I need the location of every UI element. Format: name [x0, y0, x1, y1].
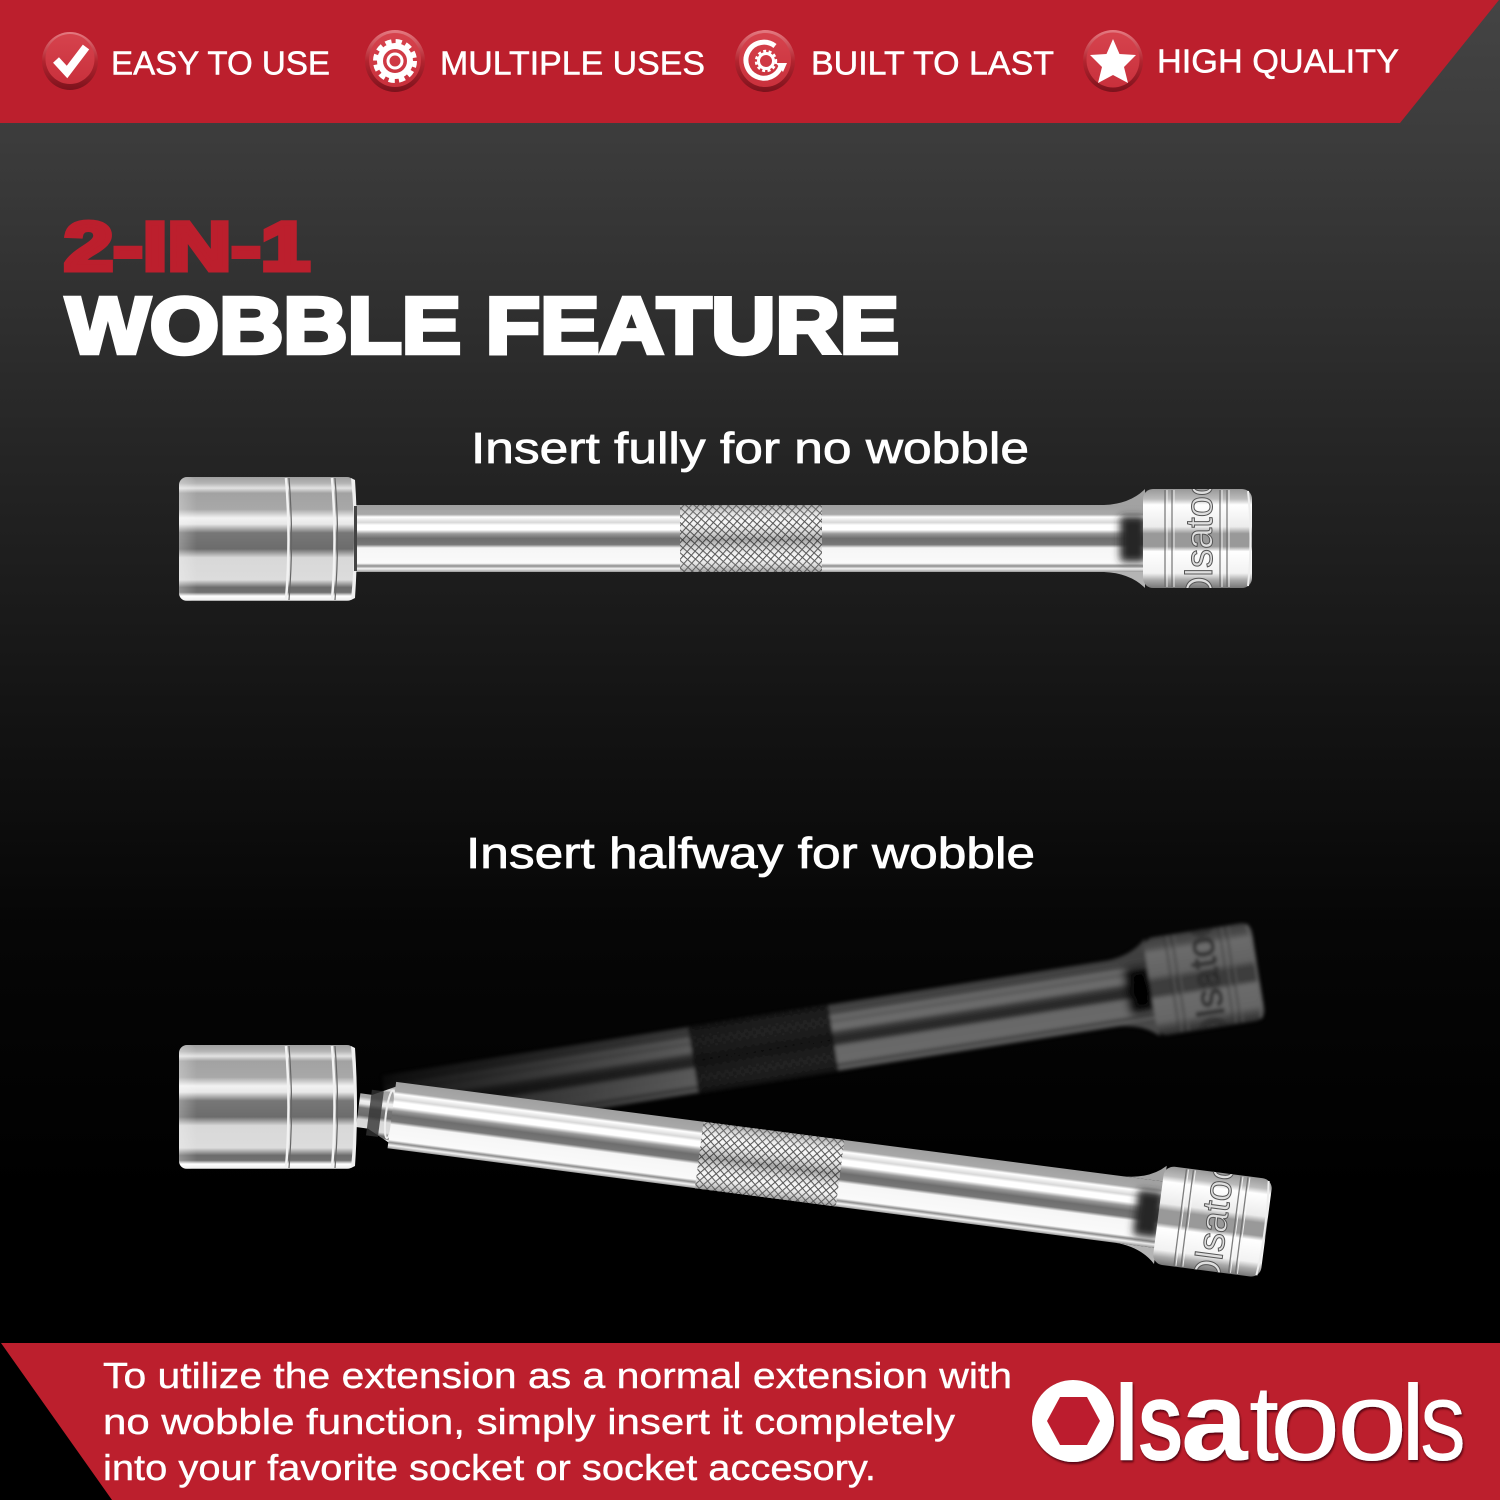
title: WOBBLE FEATURE — [66, 281, 899, 370]
logo — [1032, 1358, 1466, 1484]
description text: To utilize the extension as a normal extension with — [103, 1355, 1012, 1396]
badge: built to last: BUILT TO LAST — [811, 44, 1054, 82]
bottom banner — [1, 1343, 1500, 1500]
tool: extension fully inserted — [179, 477, 1252, 601]
top banner — [0, 0, 1499, 123]
title — [64, 208, 899, 370]
logo: s — [1137, 1358, 1184, 1484]
logo: l — [1115, 1362, 1139, 1483]
logo: o — [1337, 1360, 1407, 1484]
description text — [103, 1355, 1012, 1488]
tool: extension wobbling with socket — [179, 1045, 1272, 1276]
title: 2-IN-1 — [64, 208, 310, 285]
badge: multiple uses: MULTIPLE USES — [440, 44, 705, 82]
caption: no wobble: Insert fully for no wobble — [471, 424, 1029, 473]
logo: O — [1033, 1367, 1114, 1483]
tool: extension fully inserted: Olsatools — [1179, 448, 1221, 606]
description text: into your favorite socket or socket accesory. — [103, 1447, 876, 1488]
tool: extension wobbling with socket: Olsatools — [1185, 1129, 1247, 1292]
badge: built to last — [735, 30, 1054, 92]
logo: a — [1181, 1359, 1249, 1484]
tool: ghost wobble position: Olsatools — [1172, 886, 1238, 1049]
logo: l — [1401, 1362, 1425, 1483]
logo: t — [1249, 1362, 1279, 1483]
badge: high quality: HIGH QUALITY — [1157, 42, 1399, 80]
tool: ghost wobble position — [385, 922, 1266, 1109]
logo: s — [1420, 1358, 1466, 1484]
description text: no wobble function, simply insert it completely — [103, 1401, 956, 1442]
badge: easy to use: EASY TO USE — [111, 44, 330, 82]
logo: o — [1270, 1360, 1340, 1484]
caption: wobble: Insert halfway for wobble — [466, 829, 1035, 878]
badge: easy to use — [42, 32, 330, 90]
badge: multiple uses — [365, 30, 705, 92]
badge: high quality — [1083, 30, 1399, 92]
